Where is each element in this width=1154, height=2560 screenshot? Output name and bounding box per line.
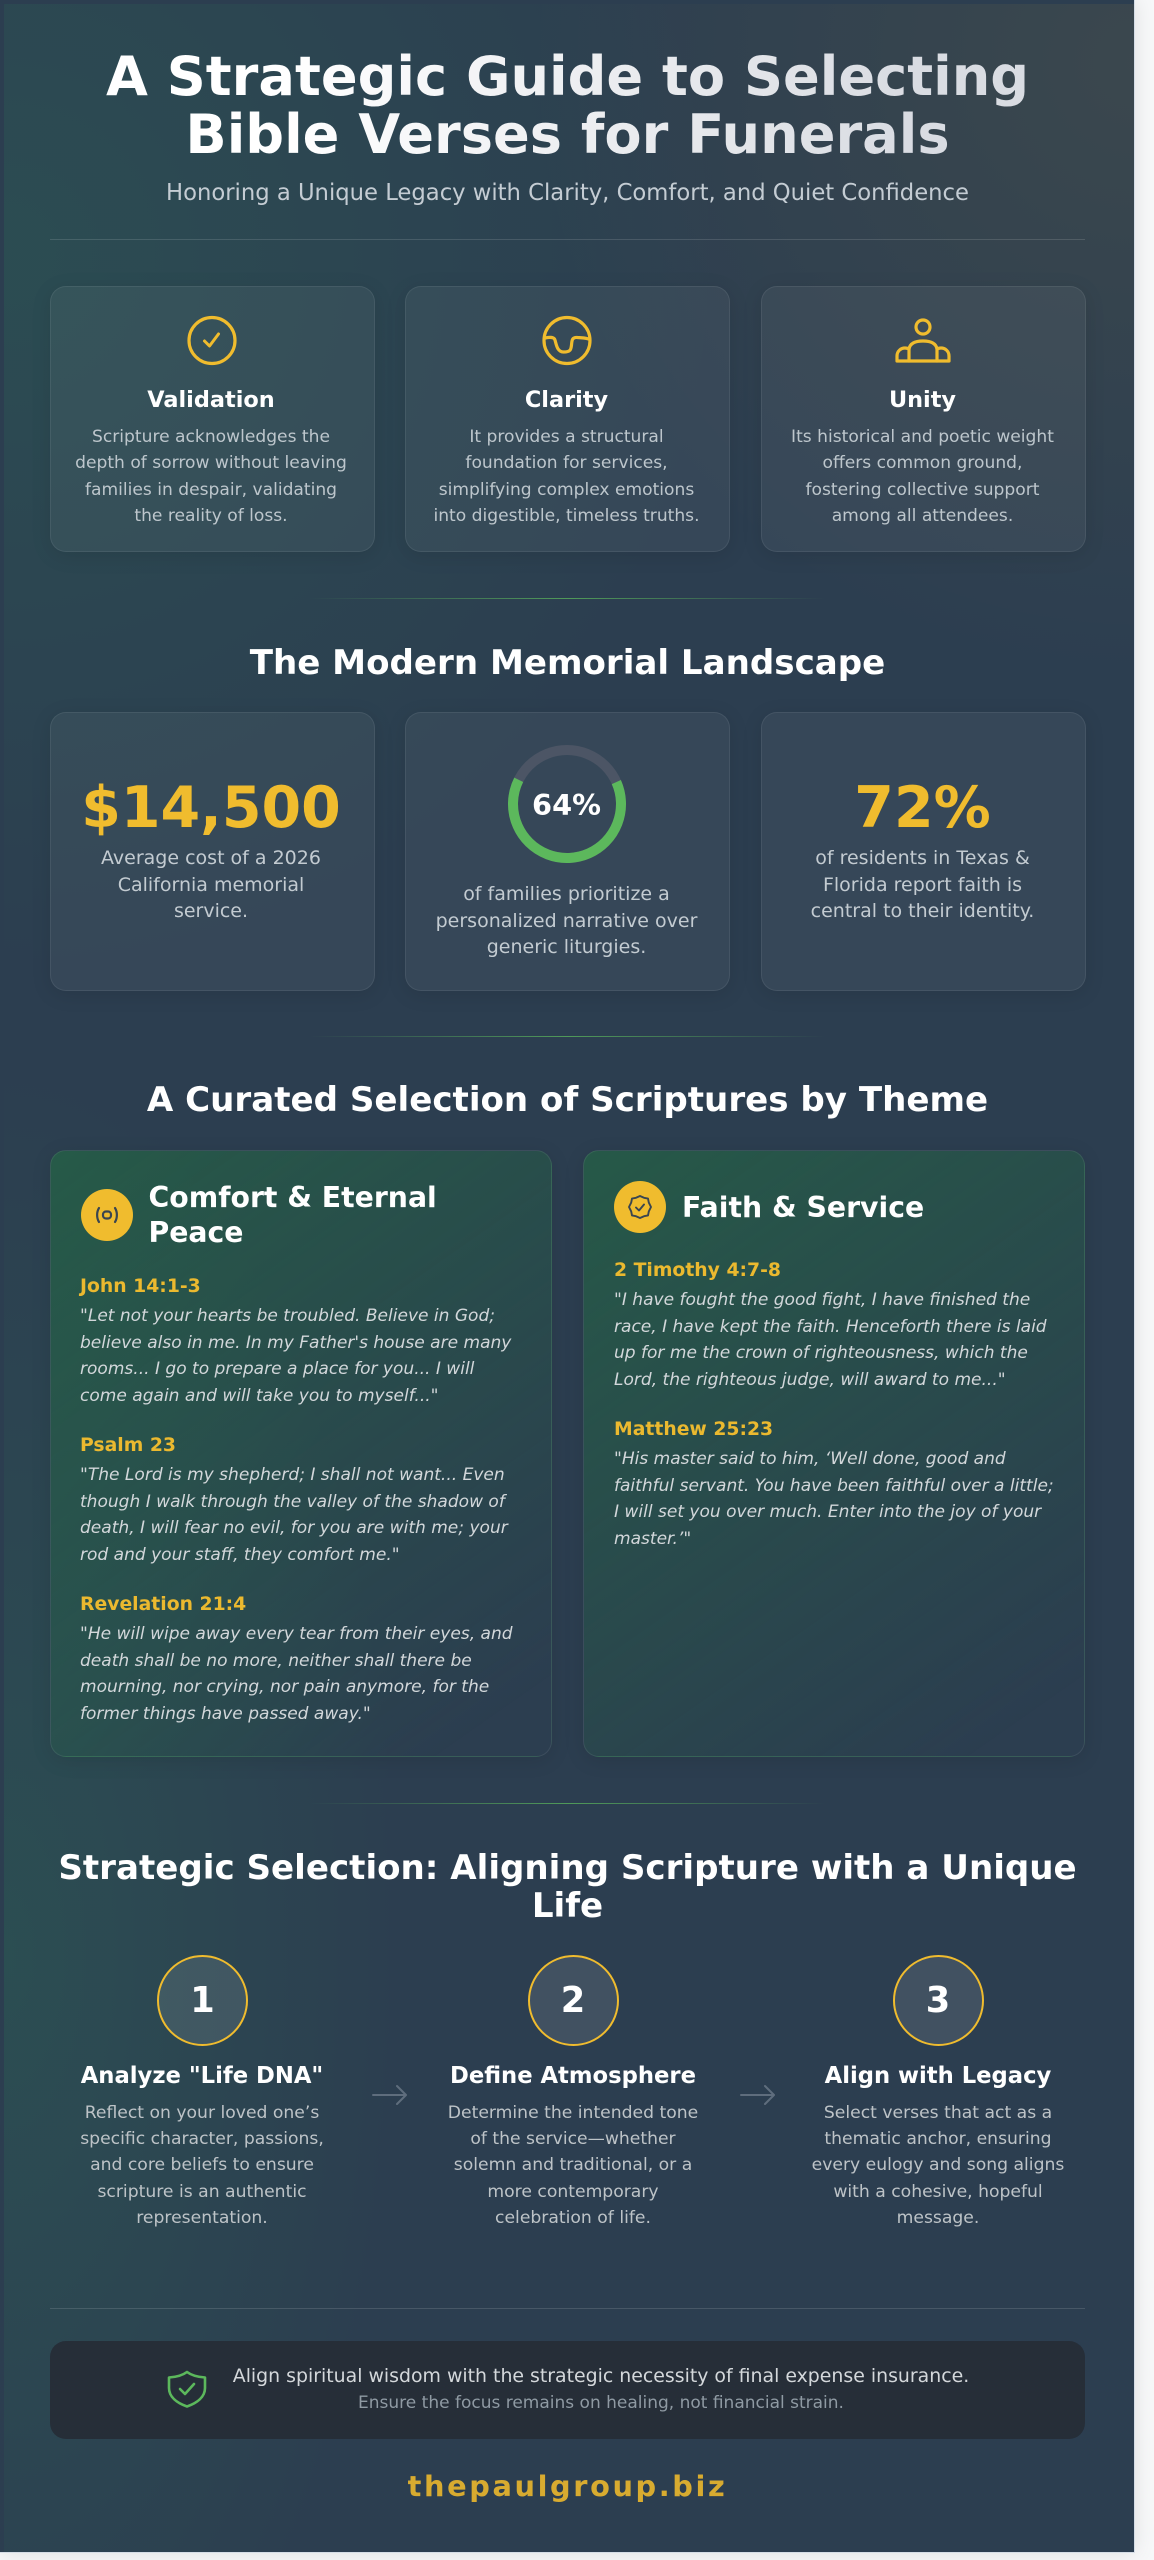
- text: validation: [75, 426, 347, 526]
- verse: Timothy: [614, 1260, 1047, 1390]
- verse: John: come again and will take you to myself...": [80, 1386, 438, 1406]
- heading: curated selection: A Curated Selection of Scriptures by Theme: [147, 1080, 988, 1120]
- step number 2: 2: [561, 1980, 585, 2021]
- step text 3: thematic anchor, ensuring: [824, 2129, 1052, 2149]
- stat number: 64%: 64%: [532, 788, 601, 822]
- verse: John: [78, 1276, 512, 1406]
- text: unity: offers common ground,: [823, 453, 1022, 473]
- stat number: 72%: 72%: [854, 775, 991, 841]
- panel: unity: [761, 286, 1086, 552]
- verse: Revelation: death shall be no more, neither shall there be: [80, 1650, 472, 1670]
- verse: Revelation: former things have passed away.": [80, 1704, 371, 1724]
- step text 3: message.: [897, 2208, 979, 2228]
- title: Bible Verses for Funerals: [185, 102, 950, 166]
- step text 3: Select verses that act as a: [824, 2102, 1052, 2122]
- step text 1: scripture is an authentic: [97, 2182, 307, 2202]
- text: unity: Its historical and poetic weight: [791, 426, 1054, 446]
- text: residents: central to their identity.: [811, 900, 1034, 922]
- verse: Timothy: "I have fought the good fight, I have finished the: [614, 1290, 1030, 1310]
- heading: unity: Unity: [889, 387, 956, 413]
- callout main text: Align spiritual wisdom with the strategic necessity of final expense insurance.: [233, 2365, 969, 2387]
- text: cost: service.: [174, 900, 248, 922]
- text: cost: [101, 847, 321, 922]
- text: residents: Florida report faith is: [823, 874, 1022, 896]
- verse: Timothy: up for me the crown of righteousness, which the: [614, 1343, 1028, 1363]
- panel: comfort and eternal peace: [50, 1150, 552, 1757]
- icon: group of people: [895, 318, 951, 363]
- verse: Matthew: [614, 1419, 1054, 1548]
- text: clarity: foundation for services,: [465, 453, 668, 473]
- step text 1: representation.: [136, 2208, 268, 2228]
- subtitle: Honoring a Unique Legacy with Clarity, Comfort, and Quiet Confidence: [166, 180, 969, 206]
- step text 3: with a cohesive, hopeful: [833, 2182, 1043, 2202]
- verse: Revelation: Revelation 21:4: [80, 1594, 246, 1615]
- callout: final expense: [50, 2341, 1085, 2439]
- panel: stat faith: [761, 712, 1086, 991]
- text: validation: the reality of loss.: [134, 506, 288, 526]
- icon: wave circle: [542, 316, 592, 366]
- step number 3: [892, 1955, 984, 2046]
- panel: clarity: [405, 286, 730, 552]
- verse: Revelation: [80, 1594, 513, 1724]
- text: clarity: simplifying complex emotions: [439, 480, 694, 500]
- step number 1: [157, 1955, 248, 2046]
- verse: Revelation: "He will wipe away every tear from their eyes, and: [80, 1624, 513, 1644]
- text: clarity: into digestible, timeless truths.: [433, 506, 700, 526]
- heading: strategic selection: [58, 1848, 1077, 1926]
- verse: John: rooms... I go to prepare a place for you... I will: [80, 1359, 474, 1379]
- step number 2: [528, 1955, 618, 2046]
- heading: strategic selection: Life: [532, 1886, 603, 1926]
- text: clarity: [433, 426, 700, 526]
- arrow 2: [740, 2085, 775, 2105]
- step text 2: more contemporary: [487, 2182, 659, 2202]
- panel: faith and service: [583, 1150, 1085, 1757]
- callout sub text: Ensure the focus remains on healing, not financial strain.: [358, 2393, 844, 2413]
- step text 3: [812, 2102, 1064, 2228]
- step text 2: solemn and traditional, or a: [454, 2155, 692, 2175]
- text: families: of families prioritize a: [463, 883, 670, 905]
- panel: validation: [50, 286, 375, 552]
- verse: Timothy: Lord, the righteous judge, will award to me...": [614, 1370, 1006, 1390]
- verse: Timothy: 2 Timothy 4:7-8: [614, 1260, 781, 1281]
- stat number: cost: $14,500: [81, 775, 341, 841]
- step number 1: 1: [190, 1980, 215, 2021]
- heading: comfort: [148, 1181, 437, 1249]
- text: cost: California memorial: [118, 874, 304, 896]
- verse: Psalm: rod and your staff, they comfort me.": [80, 1544, 400, 1564]
- verse: Matthew: "His master said to him, ‘Well done, good and: [614, 1449, 1006, 1469]
- step text 1: and core beliefs to ensure: [90, 2155, 314, 2175]
- step text 1: [80, 2102, 324, 2228]
- icon: shield: [168, 2370, 206, 2408]
- heading: comfort: Comfort & Eternal: [148, 1181, 437, 1214]
- panel: stat cost: [50, 712, 375, 991]
- step 1: [80, 1955, 324, 2228]
- step text 2: of the service—whether: [470, 2129, 676, 2149]
- text: validation: Scripture acknowledges the: [92, 426, 330, 446]
- text: residents: of residents in Texas &: [815, 847, 1030, 869]
- title: [0, 48, 1135, 163]
- step text 1: Reflect on your loved one’s: [85, 2102, 319, 2122]
- icon: check circle: [187, 316, 237, 366]
- heading: memorial landscape: The Modern Memorial Landscape: [250, 643, 885, 683]
- text: clarity: It provides a structural: [469, 426, 664, 446]
- text: validation: depth of sorrow without leaving: [75, 453, 347, 473]
- verse: Timothy: race, I have kept the faith. Henceforth there is laid: [614, 1316, 1047, 1336]
- verse: Psalm: Psalm 23: [80, 1435, 176, 1456]
- text: unity: among all attendees.: [832, 506, 1013, 526]
- panel: stat ring: [405, 712, 730, 991]
- chart: 64% donut: [508, 745, 626, 863]
- heading: validation: Validation: [147, 387, 275, 413]
- step number 3: 3: [926, 1980, 950, 2021]
- step text 2: celebration of life.: [495, 2208, 651, 2228]
- verse: Matthew: master.’": [614, 1528, 691, 1548]
- step text 3: every eulogy and song aligns: [812, 2155, 1064, 2175]
- icon: faith badge: [614, 1181, 666, 1233]
- text: unity: [791, 426, 1054, 526]
- text: residents: [811, 847, 1034, 922]
- text: families: [436, 883, 698, 958]
- step title 3: Align with Legacy: [825, 2063, 1051, 2089]
- footer url: thepaulgroup.biz: [408, 2469, 727, 2503]
- verse: Psalm: death, I will fear no evil, for you are with me; your: [80, 1518, 508, 1538]
- verse: John: "Let not your hearts be troubled. Believe in God;: [80, 1306, 495, 1326]
- verse: Matthew: I will set you over much. Enter into the joy of your: [614, 1502, 1041, 1522]
- verse: John: John 14:1-3: [80, 1276, 201, 1297]
- heading: clarity: Clarity: [525, 387, 608, 413]
- heading: faith: Faith & Service: [682, 1191, 924, 1224]
- step 3: [812, 1955, 1064, 2228]
- text: cost: Average cost of a 2026: [101, 847, 321, 869]
- verse: Psalm: [80, 1435, 509, 1564]
- heading: comfort: Peace: [148, 1216, 244, 1249]
- text: families: personalized narrative over: [436, 910, 697, 932]
- verse: Psalm: "The Lord is my shepherd; I shall not want... Even: [80, 1465, 505, 1485]
- step title 2: Define Atmosphere: [450, 2063, 696, 2089]
- heading: strategic selection: Strategic Selection: Aligning Scripture with a Unique: [58, 1848, 1077, 1888]
- verse: Matthew: faithful servant. You have been faithful over a little;: [614, 1476, 1054, 1496]
- verse: John: believe also in me. In my Father's house are many: [80, 1332, 511, 1352]
- verse: Matthew: Matthew 25:23: [614, 1419, 773, 1440]
- verse: Psalm: though I walk through the valley of the shadow of: [80, 1492, 505, 1512]
- step 2: [448, 1955, 698, 2228]
- title: A Strategic Guide to Selecting: [106, 45, 1029, 108]
- step text 1: specific character, passions,: [80, 2129, 324, 2149]
- icon: comfort badge: [80, 1189, 132, 1241]
- step title 1: Analyze "Life DNA": [81, 2063, 323, 2089]
- step text 2: [448, 2102, 698, 2228]
- step text 2: Determine the intended tone: [448, 2102, 698, 2122]
- arrow 1: [372, 2085, 407, 2105]
- verse: Revelation: mourning, nor crying, nor pain anymore, for the: [80, 1677, 489, 1697]
- text: unity: fostering collective support: [806, 480, 1039, 500]
- text: families: generic liturgies.: [487, 936, 646, 958]
- text: validation: families in despair, validating: [85, 480, 337, 500]
